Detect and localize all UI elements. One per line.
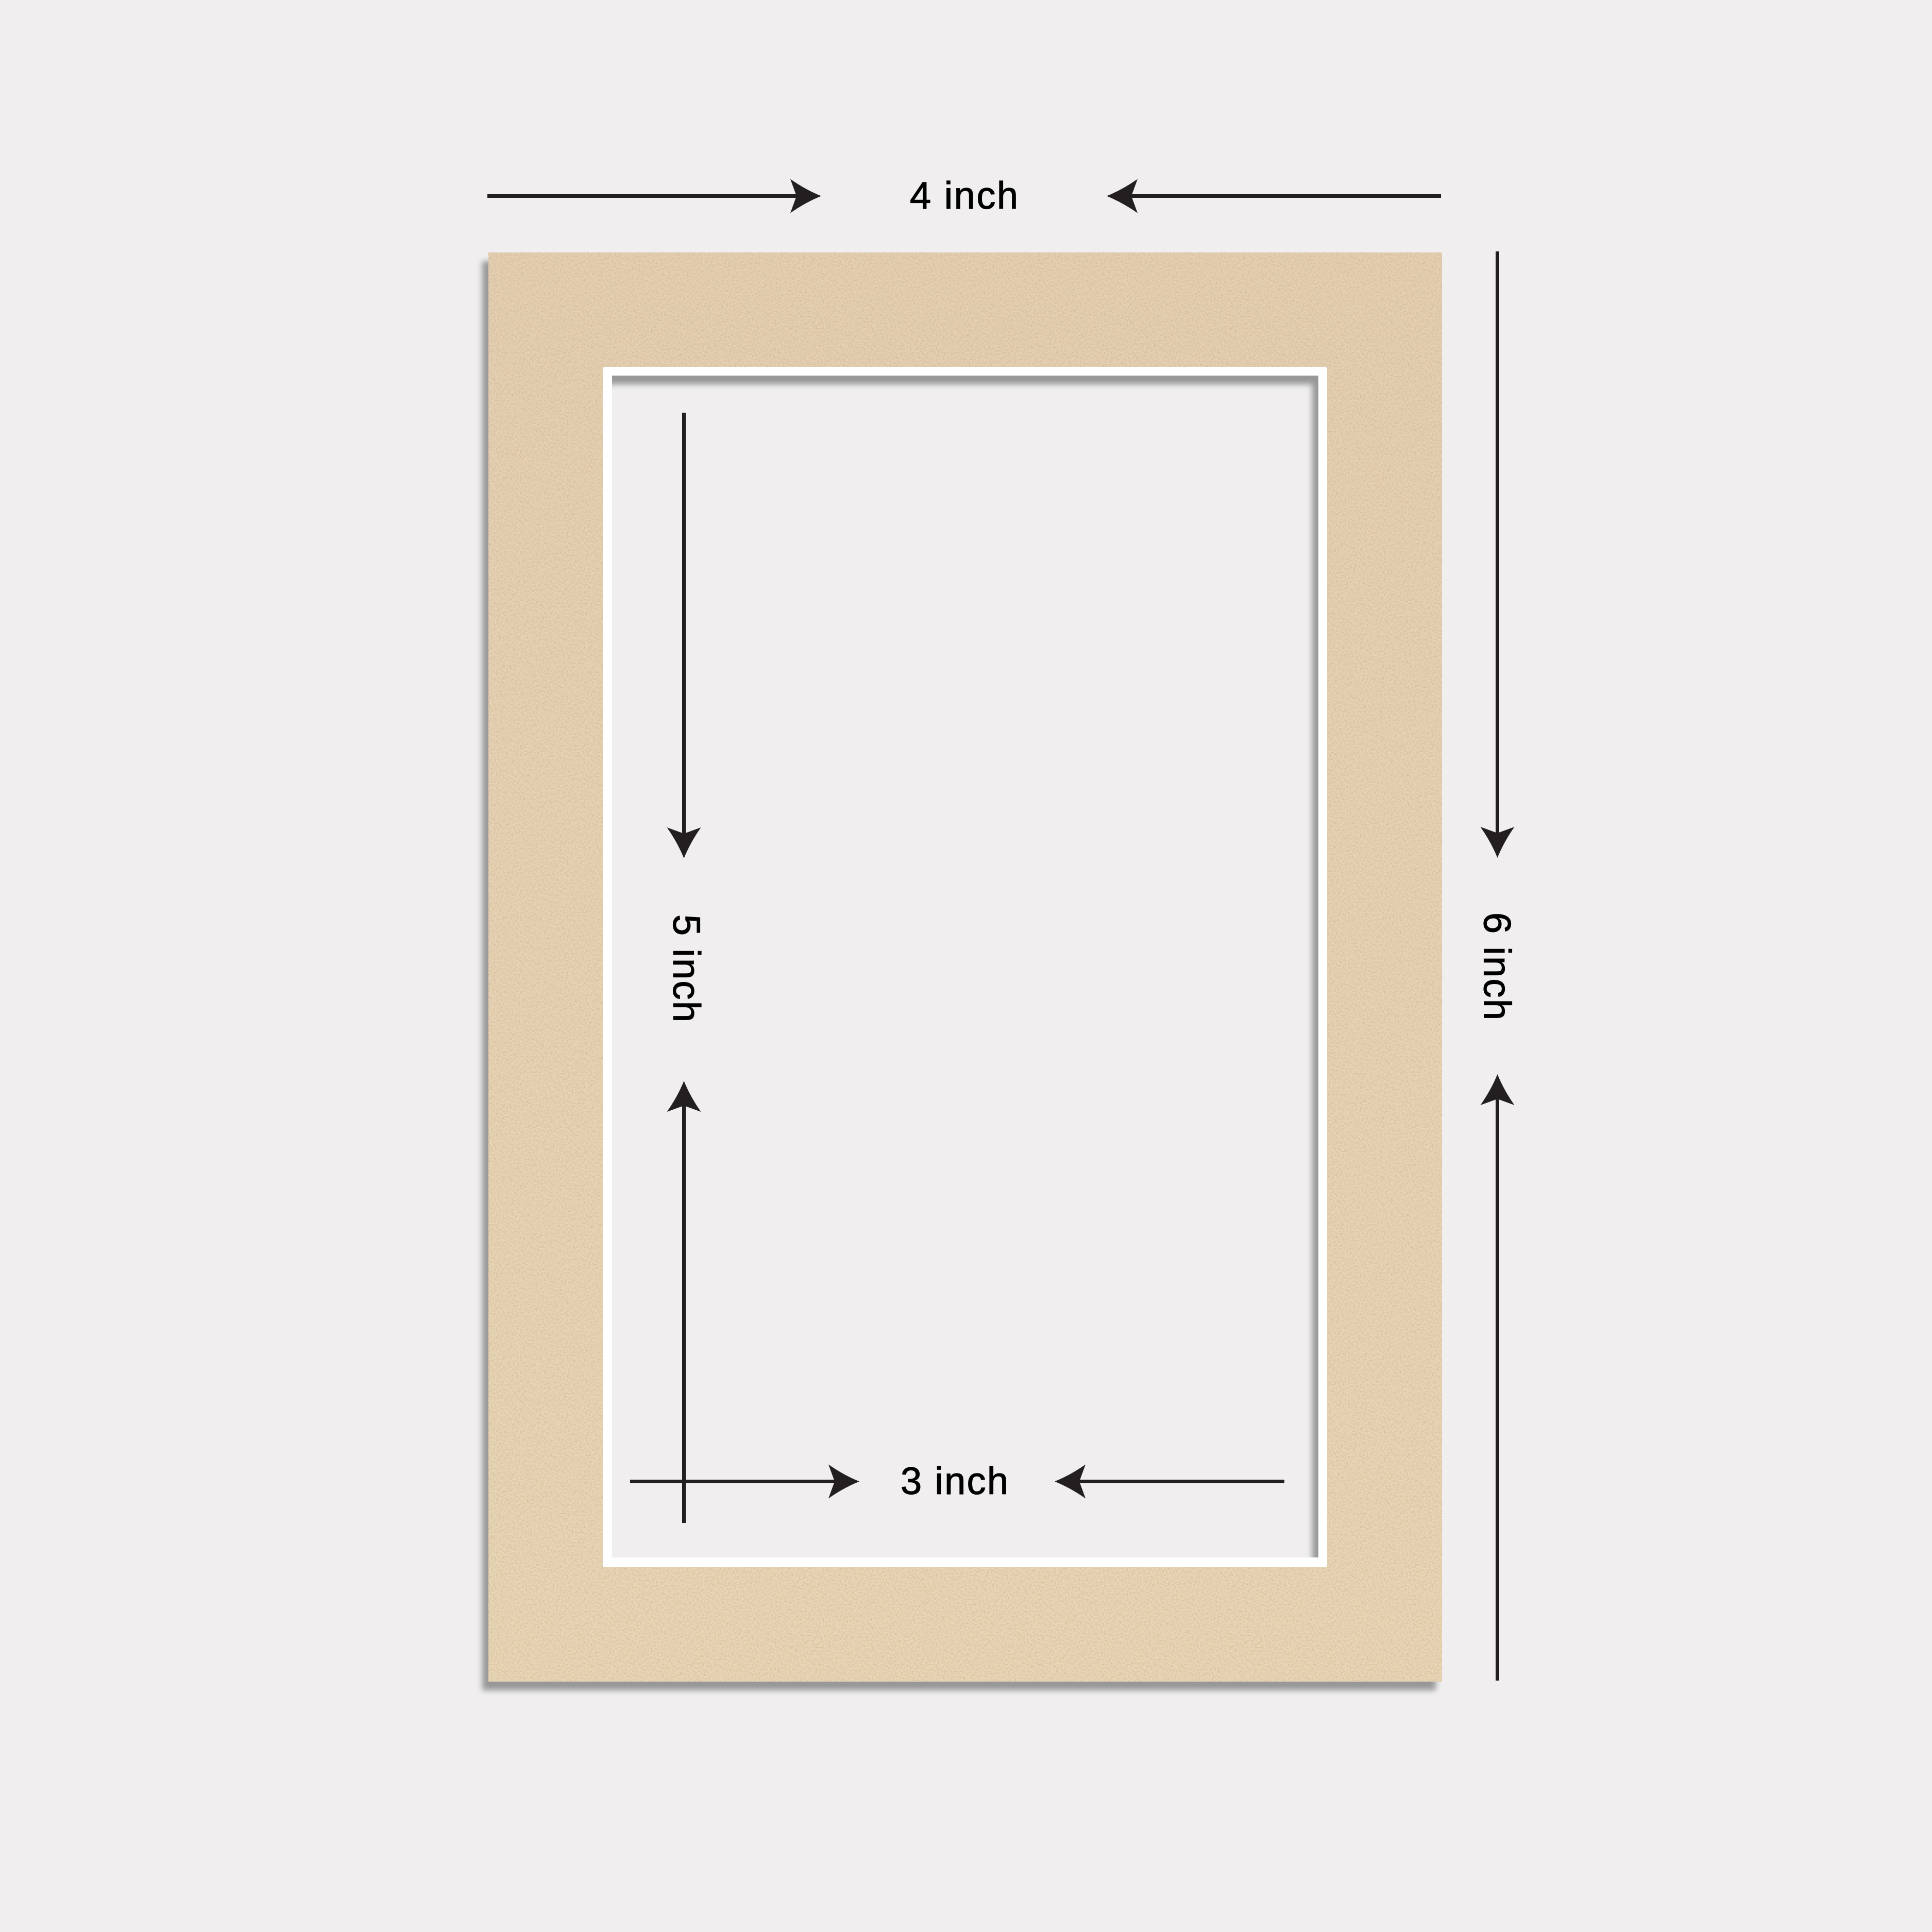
label: 3 inch: 3 inch	[901, 1460, 1008, 1502]
arrow: opening height, pointing up	[667, 1081, 701, 1523]
arrow: outer height, pointing up	[1481, 1074, 1515, 1681]
panel: beige mat board	[488, 252, 1442, 1682]
label: 5 inch: 5 inch	[665, 914, 708, 1022]
white bevel around opening	[603, 367, 1327, 1567]
arrow: top width, pointing right	[487, 179, 821, 213]
arrow: top width, pointing left	[1107, 179, 1441, 213]
arrow: opening height, pointing down	[667, 413, 701, 858]
label: 4 inch: 4 inch	[910, 174, 1018, 217]
label: 6 inch: 6 inch	[1476, 912, 1519, 1020]
arrow: opening width, pointing right	[630, 1464, 859, 1498]
drop shadow of mat	[482, 261, 1436, 1690]
arrow: opening width, pointing left	[1055, 1464, 1284, 1498]
arrow: outer height, pointing down	[1481, 251, 1515, 858]
